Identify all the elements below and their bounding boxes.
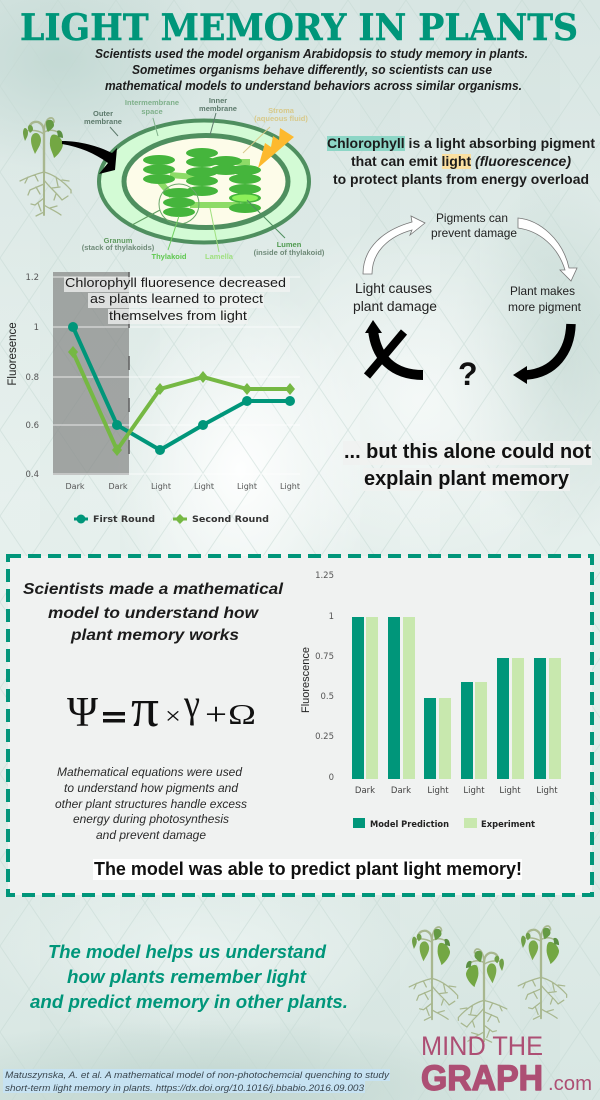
chloroplast diagram: Granum: [104, 236, 133, 245]
cycle labels: Light causes: [355, 280, 432, 296]
chloroplast diagram: Lamella: [205, 252, 234, 261]
bar chart: 0: [329, 773, 334, 783]
chloroplast diagram: membrane: [199, 104, 237, 113]
y axis labels: 0.4: [25, 470, 39, 480]
cycle labels: more pigment: [508, 300, 582, 314]
chloroplast diagram: Stroma: [268, 106, 295, 115]
equation: ×: [165, 704, 181, 730]
equation description: energy during photosynthesis: [73, 814, 229, 826]
equation description: [55, 767, 247, 842]
chloroplast diagram: (stack of thylakoids): [82, 243, 155, 252]
bar chart: 0.25: [315, 732, 334, 742]
y axis title: Fluoresence: [7, 322, 19, 386]
arrow: pigment to plant: [518, 218, 577, 281]
x axis labels: Light: [237, 482, 257, 491]
chlorophyll explanation: that can emit light (fluorescence): [351, 154, 572, 169]
bar chart: Light: [536, 786, 558, 796]
chloroplast diagram: Thylakoid: [151, 252, 187, 261]
icon: sun ray arrow: [258, 128, 294, 168]
chloroplast diagram: (aqueous fluid): [254, 114, 308, 123]
icon: wilting plant: [20, 118, 71, 216]
citation: short-term light memory in plants. https://dx.doi.org/10.1016/j.bbabio.2016.09.003: [5, 1083, 364, 1093]
equation description: and prevent damage: [96, 830, 206, 842]
x axis labels: [66, 482, 300, 491]
takeaway text: how plants remember light: [67, 967, 307, 987]
bar chart legend: [353, 818, 535, 830]
citation: Matuszynska, A. et al. A mathematical model of non-photochemcial quenching to study: [5, 1070, 390, 1080]
equation: +: [205, 696, 227, 732]
bar chart: Light: [463, 786, 485, 796]
panel heading: plant memory works: [70, 627, 239, 644]
logo: Mind the Graph: [421, 1031, 592, 1098]
logo: Mind the Graph: GRAPH: [421, 1059, 543, 1098]
bar chart: 1: [329, 612, 334, 622]
bar chart: Fluorescence: [300, 647, 312, 713]
chloroplast diagram: Inner: [209, 96, 227, 105]
series: first round: [68, 322, 295, 455]
chloroplast diagram: membrane: [84, 117, 122, 126]
chlorophyll explanation: to protect plants from energy overload: [333, 172, 589, 187]
arrow: plant to chloroplast: [62, 141, 117, 174]
panel heading: model to understand how: [48, 605, 260, 622]
y axis labels: [25, 273, 39, 480]
citation: [3, 1069, 390, 1093]
conclusion: not enough: ... but this alone could not: [344, 441, 591, 463]
equation: Ψ: [67, 690, 98, 736]
chloroplast diagram: space: [141, 107, 163, 116]
chart caption: as plants learned to protect: [90, 291, 263, 306]
y axis labels: 0.8: [25, 373, 39, 383]
panel heading: [23, 581, 284, 644]
takeaway text: The model helps us understand: [48, 942, 327, 962]
arrow: crossed out: [365, 320, 423, 376]
bar chart: [300, 571, 561, 830]
x axis labels: Dark: [66, 482, 85, 491]
chart caption: [64, 275, 290, 324]
bar chart: Dark: [391, 786, 411, 796]
series: second round: [68, 346, 295, 456]
equation description: other plant structures handle excess: [55, 799, 247, 811]
chloroplast diagram: [82, 96, 325, 261]
equation description: to understand how pigments and: [64, 783, 239, 795]
intro text: Scientists used the model organism Arabidopsis to study memory in plants.: [95, 47, 528, 61]
chloroplast diagram: Outer: [93, 109, 113, 118]
takeaway text: [30, 942, 348, 1012]
x axis labels: Light: [194, 482, 214, 491]
cycle labels: Pigments can: [436, 211, 508, 225]
bar chart legend: Model Prediction: [370, 820, 449, 830]
line chart: [7, 272, 300, 525]
equation: γ: [183, 681, 200, 726]
title: LIGHT MEMORY IN PLANTS: [20, 7, 578, 49]
bar chart: 0.75: [315, 652, 334, 662]
chart caption: themselves from light: [109, 308, 247, 323]
intro text: [95, 47, 528, 93]
intro text: Sometimes organisms behave differently, so scientists can use: [132, 63, 492, 77]
cycle diagram: [353, 211, 582, 392]
arrow: black return: [513, 324, 571, 384]
chloroplast diagram: Intermembrane: [125, 98, 179, 107]
cycle labels: Plant makes: [510, 284, 575, 298]
bar chart: Light: [427, 786, 449, 796]
logo: Mind the Graph: MIND THE: [421, 1031, 543, 1061]
equation: π: [131, 678, 159, 738]
question mark: ?: [458, 356, 478, 392]
takeaway text: and predict memory in other plants.: [30, 992, 348, 1012]
bar chart: 1.25: [315, 571, 334, 581]
legend: [74, 514, 269, 525]
chlorophyll explanation: Chlorophyll is a light absorbing pigment: [327, 136, 596, 151]
panel heading: Scientists made a mathematical: [23, 581, 284, 598]
y axis labels: 1: [34, 323, 39, 333]
cycle labels: prevent damage: [431, 226, 517, 240]
x axis labels: Light: [280, 482, 300, 491]
logo: Mind the Graph: .com: [548, 1073, 592, 1095]
equation description: Mathematical equations were used: [57, 767, 243, 779]
x axis labels: Dark: [109, 482, 128, 491]
chloroplast diagram: Lumen: [277, 240, 302, 249]
bar chart legend: Experiment: [481, 820, 535, 830]
chloroplast diagram: (inside of thylakoid): [254, 248, 325, 257]
intro text: mathematical models to understand behaviors across similar organisms.: [105, 79, 522, 93]
y axis labels: 0.6: [25, 421, 39, 431]
bar chart: Dark: [355, 786, 375, 796]
arrow: damage to pigment: [363, 216, 425, 274]
icon: plant group: [409, 926, 567, 1042]
bar chart: Light: [499, 786, 521, 796]
conclusion: not enough: explain plant memory: [364, 468, 570, 490]
x axis labels: Light: [151, 482, 171, 491]
cycle labels: plant damage: [353, 298, 437, 314]
equation: Ω: [228, 700, 256, 731]
equation: [67, 678, 256, 738]
model result: The model was able to predict plant light memory!: [94, 859, 522, 879]
cycle labels: [353, 211, 582, 314]
panel: mathematical model: [8, 556, 592, 895]
bar chart: 0.5: [320, 692, 334, 702]
conclusion: not enough: [343, 441, 592, 491]
legend: First Round: [93, 515, 155, 525]
chlorophyll explanation: [327, 136, 596, 187]
y axis labels: 1.2: [25, 273, 39, 283]
chart caption: Chlorophyll fluoresence decreased: [65, 275, 286, 290]
legend: Second Round: [192, 515, 269, 525]
